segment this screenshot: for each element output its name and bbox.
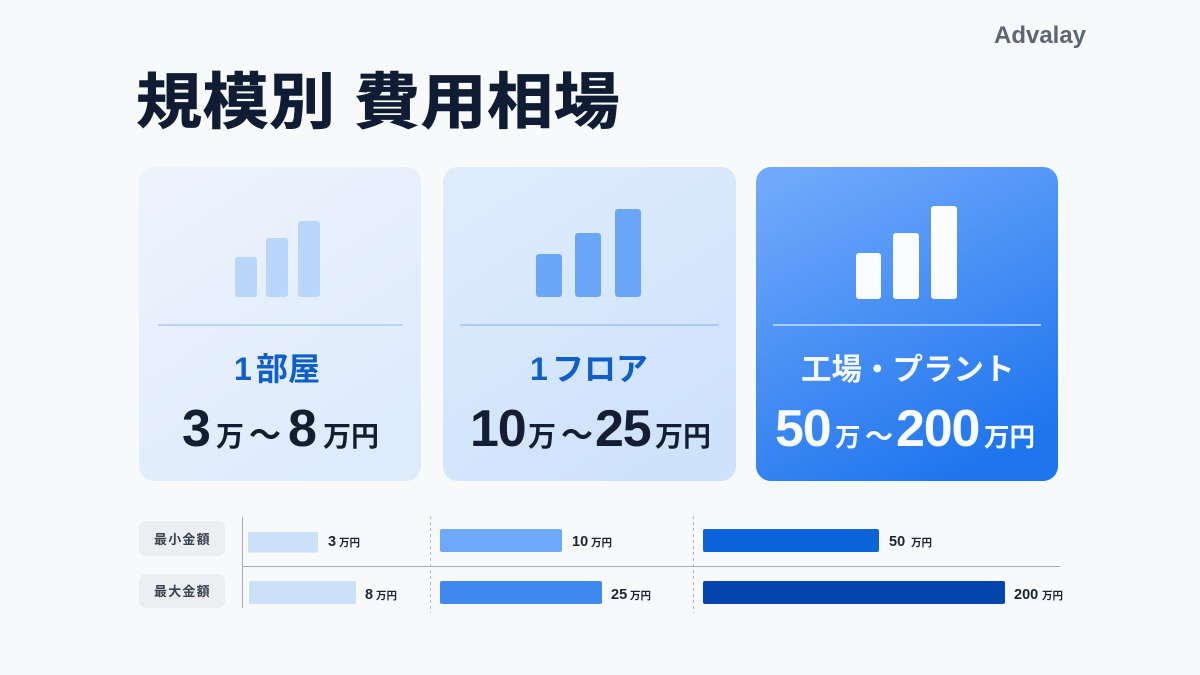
- logo: Advalay: Advalay: [994, 22, 1086, 49]
- value: 3万～8万円: 3: [182, 400, 211, 458]
- panel: 1部屋: [139, 167, 421, 481]
- value: 50万～200万円: 200: [896, 400, 979, 458]
- title: 規模別: [136, 53, 336, 141]
- panel: 工場・プラント: [756, 167, 1058, 481]
- row label: 最小金額: [139, 521, 225, 556]
- icon: bar chart medium: [536, 209, 641, 297]
- bar: 工場 minimum: 50: [889, 534, 905, 550]
- bar: 1部屋 minimum: 3: [328, 534, 336, 550]
- value: 50万～200万円: 万: [835, 417, 861, 454]
- bar: 工場 minimum: [703, 529, 932, 552]
- label: 1フロア: フロア: [552, 344, 648, 390]
- value: 10万～25万円: 10: [470, 400, 525, 458]
- bar: 1部屋 maximum: 万円: [376, 588, 397, 603]
- icon: bar chart small: [235, 221, 320, 297]
- value: 3万～8万円: 万: [216, 415, 244, 455]
- bar: 工場 minimum: 万円: [911, 535, 932, 550]
- label: 1部屋: 1: [234, 351, 252, 387]
- value: 10万～25万円: 25: [595, 400, 651, 458]
- value: 50万～200万円: 万円: [984, 417, 1035, 454]
- value: 10万～25万円: 万: [528, 415, 556, 455]
- bar: 工場 maximum: 200: [1014, 587, 1038, 603]
- value: 3万～8万円: ～: [249, 410, 281, 456]
- bar: 1部屋 minimum: 万円: [339, 535, 360, 550]
- bar: 1フロア maximum: [440, 581, 651, 604]
- value: 3万～8万円: 万円: [323, 415, 379, 455]
- bar: 1フロア minimum: 10: [572, 534, 588, 550]
- comparison chart: [139, 516, 1063, 613]
- value: 50万～200万円: ～: [865, 415, 893, 455]
- bar: 1部屋 maximum: 8: [365, 587, 373, 603]
- bar: 1フロア minimum: [440, 529, 612, 552]
- panel: 1フロア: [443, 167, 736, 481]
- bar: 工場 maximum: 万円: [1042, 588, 1063, 603]
- bar: 1フロア maximum: 万円: [630, 588, 651, 603]
- row label: 最大金額: 最大金額: [154, 581, 211, 600]
- label: 工場・プラント: 工場・プラント: [801, 345, 1014, 389]
- bar: 1フロア minimum: 万円: [591, 535, 612, 550]
- bar: 工場 maximum: [703, 581, 1063, 604]
- row label: 最大金額: [139, 574, 225, 608]
- icon: bar chart large: [856, 206, 957, 299]
- label: 1フロア: 1: [530, 351, 548, 387]
- bar: 1部屋 maximum: [249, 581, 397, 604]
- value: 10万～25万円: 万円: [655, 415, 711, 455]
- value: 10万～25万円: ～: [561, 410, 593, 456]
- bar: 1フロア maximum: 25: [611, 587, 627, 603]
- title: 費用相場: [354, 53, 620, 141]
- value: 50万～200万円: 50: [775, 400, 830, 458]
- value: 3万～8万円: 8: [288, 400, 317, 458]
- label: 1部屋: 部屋: [256, 344, 320, 390]
- row label: 最小金額: 最小金額: [154, 529, 211, 548]
- bar: 1部屋 minimum: [248, 532, 360, 552]
